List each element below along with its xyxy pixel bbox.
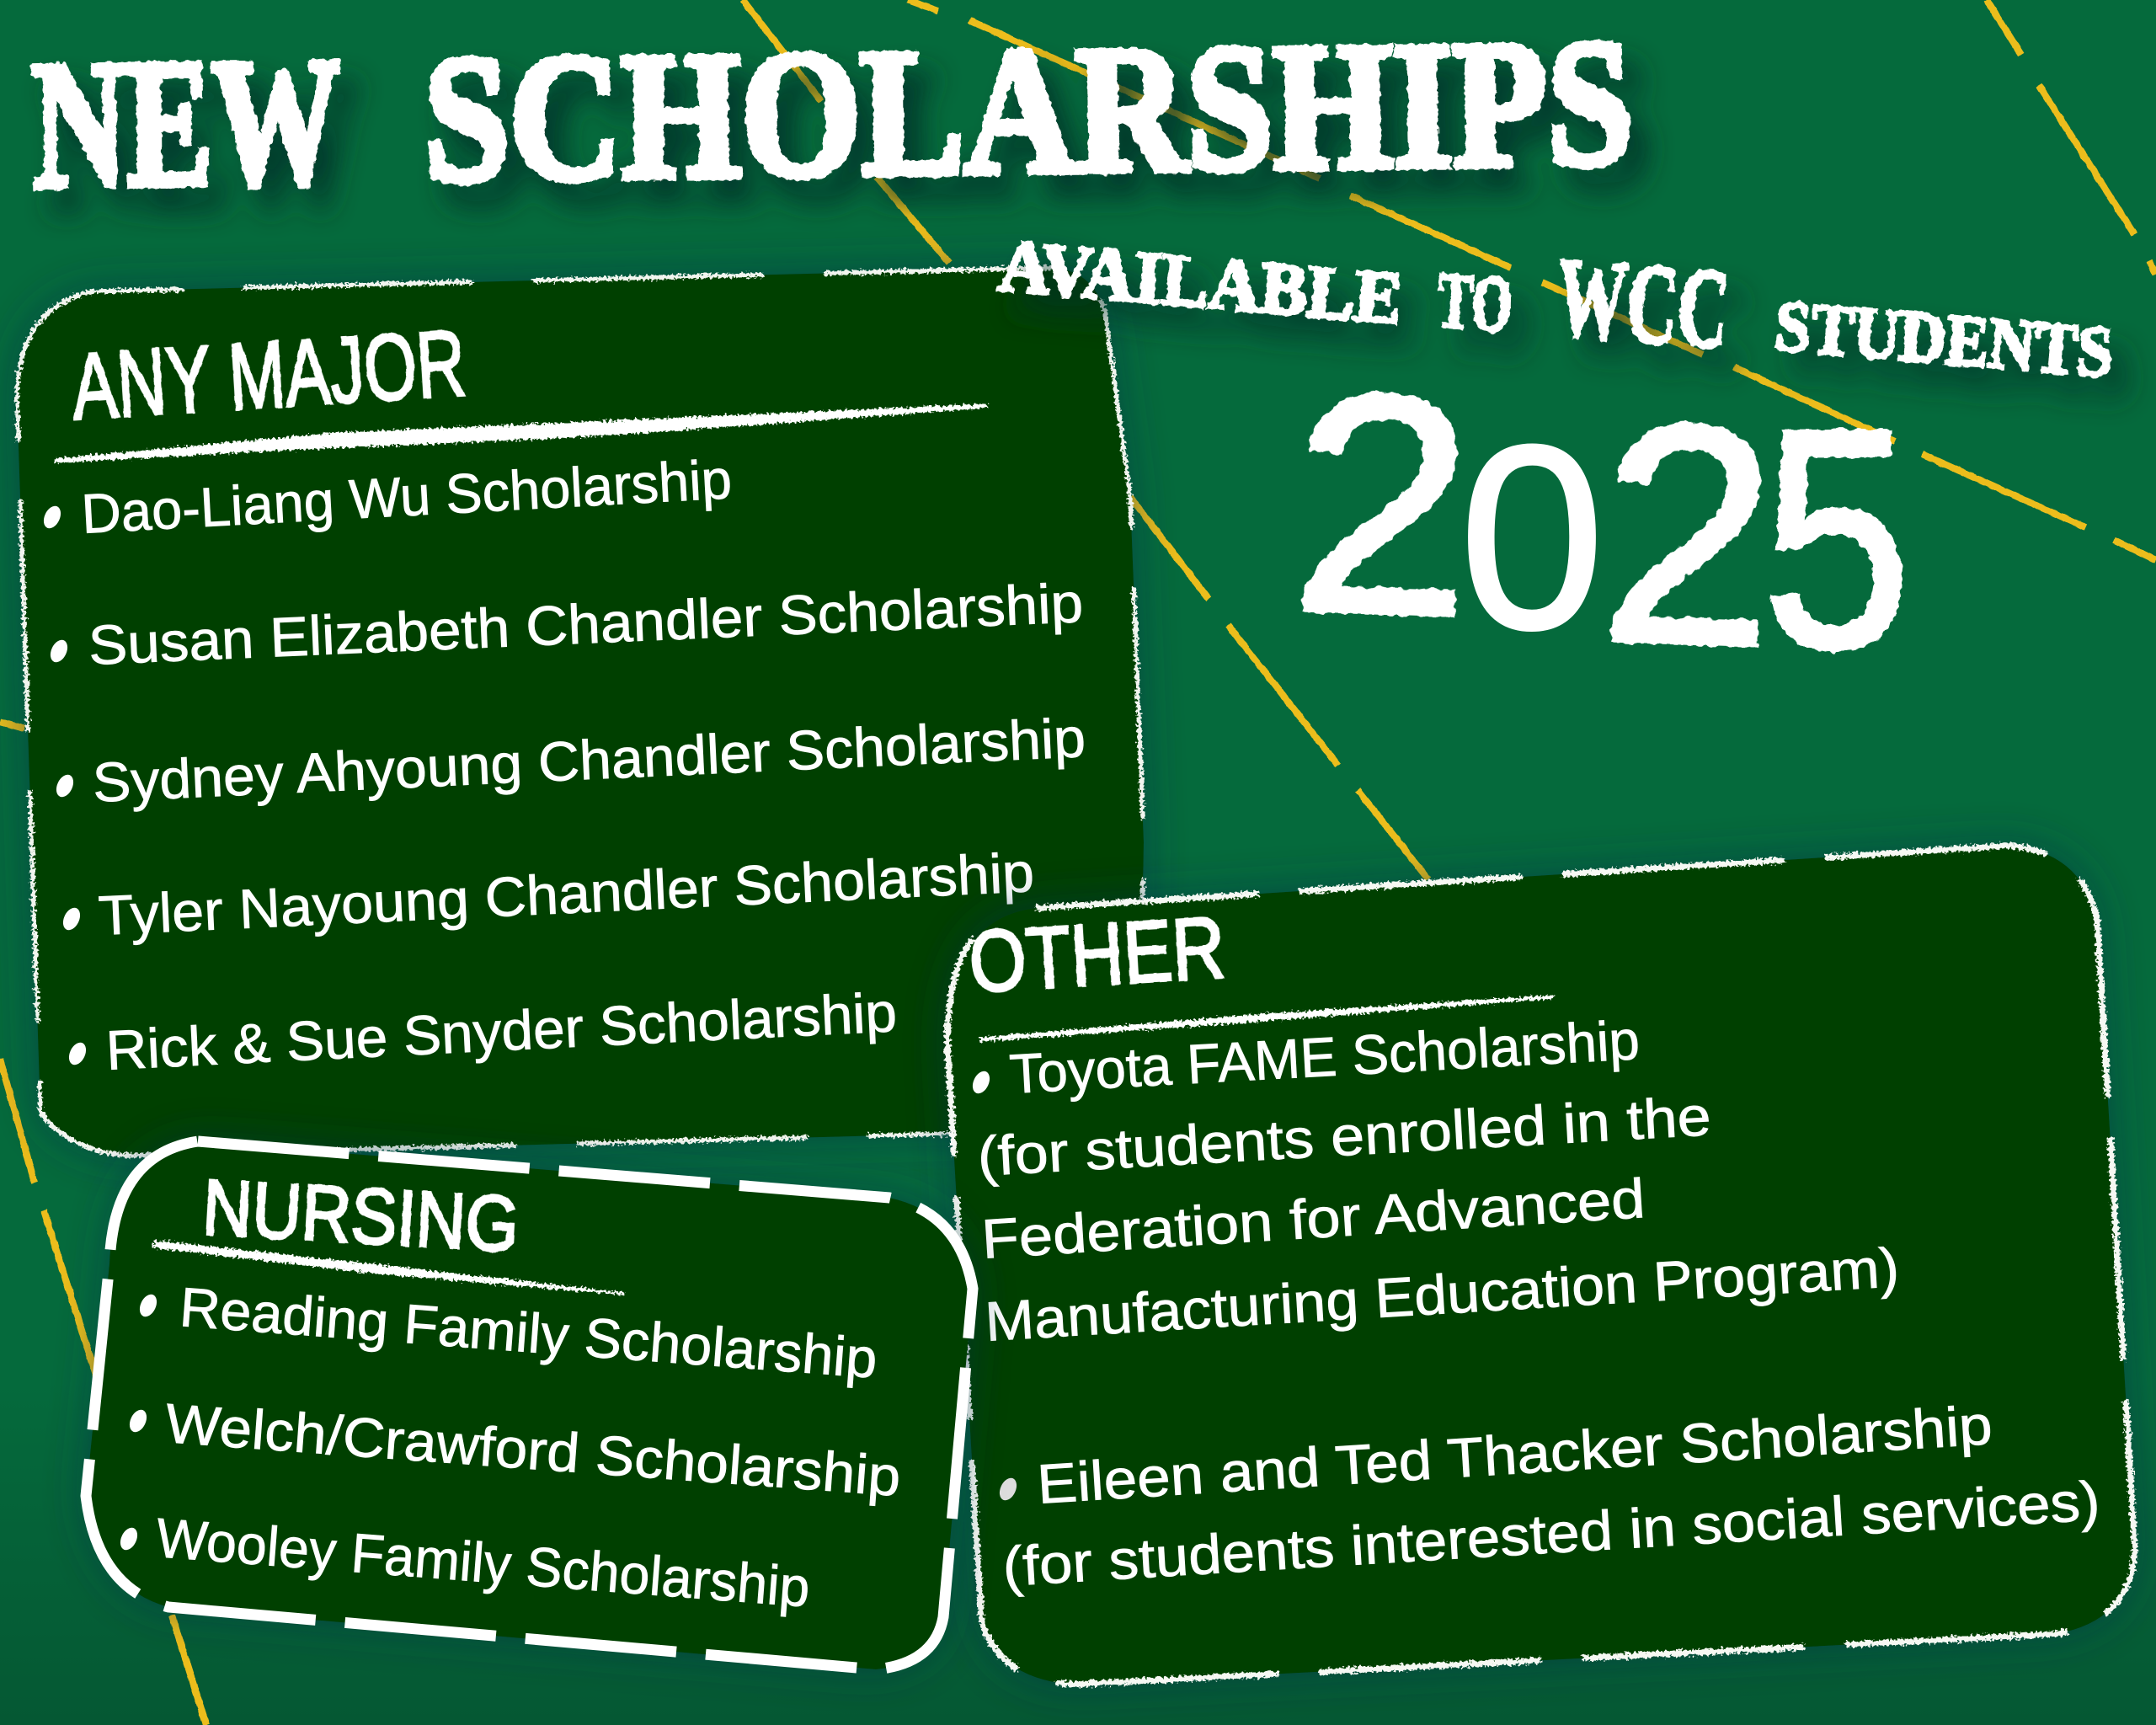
panel: other xyxy=(947,846,2135,1685)
subtitle xyxy=(995,225,2116,393)
subtitle: TO xyxy=(1434,256,1516,349)
title: SCHOLARSHIPS xyxy=(422,2,1635,220)
any major item 5: Rick & Sue Snyder Scholarship xyxy=(104,980,899,1081)
other item: toyota fame: Federation for Advanced xyxy=(979,1167,1646,1270)
other item: toyota fame xyxy=(969,1008,1901,1353)
any major item 1: Dao-Liang Wu Scholarship xyxy=(80,447,734,545)
subtitle: WCC xyxy=(1552,234,1733,373)
any major item 2: Susan Elizabeth Chandler Scholarship xyxy=(87,571,1085,676)
year 2025: 2 xyxy=(1595,356,1781,713)
bullet xyxy=(47,638,71,665)
any major heading: ANY MAJOR xyxy=(69,310,469,440)
bullet xyxy=(40,504,64,531)
subtitle: AVAILABLE xyxy=(995,225,1406,340)
year 2025: 0 xyxy=(1460,391,1604,683)
nursing underline xyxy=(154,1241,624,1295)
other item: thacker: (for students interested in social services) xyxy=(1001,1469,2101,1598)
nursing item 2: Welch/Crawford Scholarship xyxy=(163,1391,903,1508)
other item: toyota fame: Toyota FAME Scholarship xyxy=(1008,1008,1641,1105)
title: NEW xyxy=(31,20,343,226)
bullet xyxy=(53,772,77,799)
any major board xyxy=(17,268,1144,1156)
subtitle: STUDENTS xyxy=(1772,285,2116,393)
bullet xyxy=(996,1476,1020,1503)
any major item 3: Sydney Ahyoung Chandler Scholarship xyxy=(91,706,1086,814)
other underline xyxy=(980,996,1554,1041)
bullet xyxy=(60,905,83,932)
other heading: OTHER xyxy=(966,899,1228,1012)
other board xyxy=(947,846,2135,1685)
bullet xyxy=(66,1040,89,1067)
other item: thacker: Eileen and Ted Thacker Scholarship xyxy=(1035,1393,1994,1515)
year 2025: 5 xyxy=(1763,363,1911,713)
year 2025: 2 xyxy=(1286,326,1479,682)
title xyxy=(31,2,1635,226)
panel: nursing xyxy=(86,1141,973,1669)
nursing board xyxy=(86,1141,973,1669)
other chalk border xyxy=(947,846,2135,1685)
any major chalk border xyxy=(17,268,1144,1156)
nursing heading: NURSING xyxy=(200,1162,521,1268)
other item: toyota fame: Manufacturing Education Program) xyxy=(983,1236,1901,1353)
bullet xyxy=(969,1069,993,1096)
any major underline xyxy=(55,404,987,462)
nursing item 1: Reading Family Scholarship xyxy=(178,1275,879,1390)
other item: thacker xyxy=(996,1393,2101,1598)
panel: any major xyxy=(17,268,1144,1156)
any major item 4: Tyler Nayoung Chandler Scholarship xyxy=(97,841,1035,947)
nursing item 3: Wooley Family Scholarship xyxy=(154,1506,812,1619)
nursing dashed border xyxy=(86,1141,973,1669)
year 2025 xyxy=(1286,326,1911,713)
bullet xyxy=(136,1292,160,1319)
bullet xyxy=(126,1407,150,1434)
bullet xyxy=(117,1525,141,1552)
other item: toyota fame: (for students enrolled in the xyxy=(976,1084,1712,1188)
